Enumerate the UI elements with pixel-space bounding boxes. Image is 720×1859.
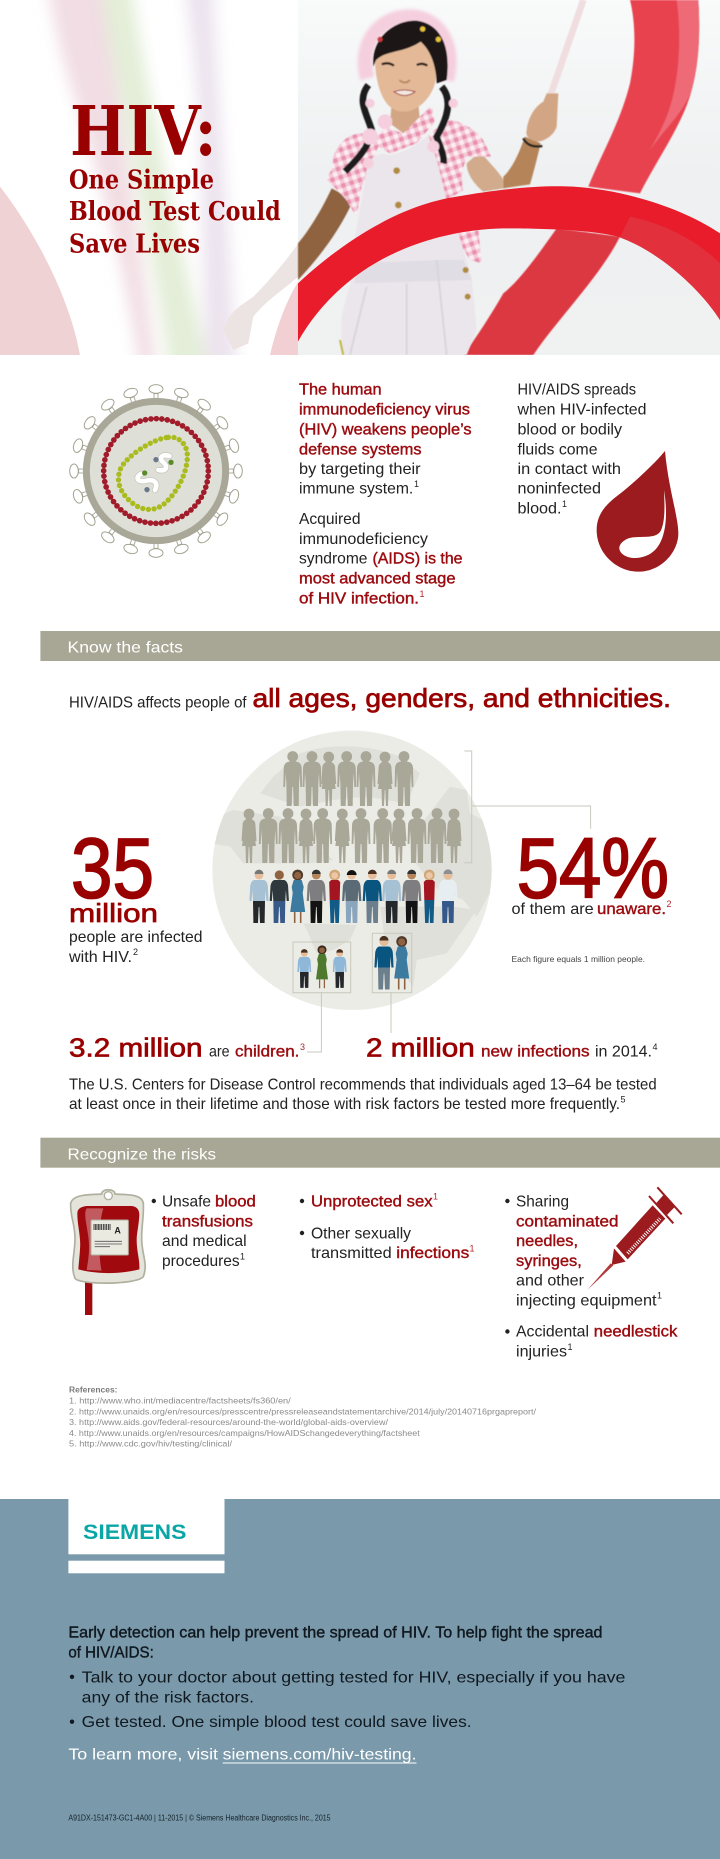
feathers [362, 99, 458, 169]
call to action: of HIV/AIDS: [68, 1644, 154, 1661]
pigtails [345, 85, 372, 172]
text block: how HIV spreads: fluids come [518, 441, 598, 458]
text block: how HIV spreads: blood or bodily [518, 421, 622, 438]
stat: 54 percent unaware: unaware. [597, 901, 666, 918]
section heading: Know the facts: Know the facts [68, 640, 183, 657]
section heading: Recognize the risks: Recognize the risks [68, 1146, 216, 1163]
unaware figures, row 2 [242, 808, 462, 863]
list: needles and needlestick: 1 [657, 1290, 662, 1300]
list: blood transfusions: transfusions [162, 1213, 253, 1230]
chart: globe with people figures [210, 731, 493, 1010]
list: blood transfusions: 1 [240, 1252, 245, 1262]
stat: 3.2 million children: children. [235, 1044, 299, 1061]
list: needles and needlestick: needles, [516, 1233, 578, 1250]
face [375, 35, 436, 112]
stat: 2 million new infections: 4 [652, 1042, 658, 1052]
headline: affects all ages: HIV/AIDS affects people of [69, 695, 247, 712]
list: blood transfusions: procedures [162, 1253, 240, 1270]
text block: HIV and AIDS definition: immunodeficiency [299, 531, 428, 548]
list: unprotected sex and infections: 1 [470, 1244, 475, 1254]
connector: unaware bracket [307, 751, 591, 1052]
stat: 3.2 million children: are [209, 1044, 230, 1061]
text block: HIV and AIDS definition: (AIDS) is the [372, 551, 463, 568]
arms [298, 188, 353, 280]
stat: 2 million new infections: 2 million [366, 1033, 475, 1063]
list: needles and needlestick: contaminated [516, 1213, 618, 1230]
text block: HIV and AIDS definition: defense systems [299, 441, 422, 458]
stat: 3.2 million children [69, 1033, 305, 1063]
front ribbon arch [298, 186, 720, 342]
stat: 35 million: with HIV. [68, 949, 132, 966]
text block: CDC recommendation: at least once in their lifetime and those with risk factors be tested more frequently. [69, 1096, 620, 1113]
references [69, 1385, 537, 1449]
list: needles and needlestick: Accidental [516, 1324, 589, 1341]
title: Blood Test Could [69, 197, 281, 227]
list: needles and needlestick: syringes, [516, 1253, 582, 1270]
text block: CDC recommendation [69, 1076, 657, 1113]
call to action: siemens.com/hiv-testing. [223, 1746, 416, 1763]
stat: 2 million new infections: in 2014. [595, 1044, 652, 1061]
section heading: Recognize the risks [40, 1138, 720, 1168]
stat: 3.2 million children: 3.2 million [69, 1033, 202, 1063]
icon: blood drop [597, 451, 678, 572]
references: 1. http://www.who.int/mediacentre/factsheets/fs360/en/ [69, 1395, 291, 1405]
text block: HIV and AIDS definition: by targeting their [299, 461, 421, 478]
list: needles and needlestick: needlestick [594, 1324, 677, 1341]
call to action: Get tested. One simple blood test could save lives. [82, 1714, 472, 1731]
text block: how HIV spreads: HIV/AIDS spreads [518, 382, 636, 399]
stat: 35 million: 2 [133, 947, 138, 957]
footer panel [0, 1499, 720, 1859]
list: unprotected sex and infections: Unprotected sex [311, 1193, 433, 1210]
text block: how HIV spreads: blood. [518, 500, 562, 517]
shirt [326, 133, 383, 217]
aware figures, coloured row [249, 869, 458, 923]
call to action [68, 1624, 626, 1763]
unaware figures, row 1 [283, 751, 413, 806]
list: unprotected sex and infections: Other sexually [311, 1225, 411, 1242]
faded left photo background [0, 0, 298, 373]
stat: 54 percent unaware: of them are [512, 901, 594, 918]
list: needles and needlestick: and other [516, 1273, 584, 1290]
text block: how HIV spreads: noninfected [518, 481, 601, 498]
references: 4. http://www.unaids.org/en/resources/campaigns/HowAIDSchangedeverything/factsheet [69, 1428, 420, 1438]
neck [390, 103, 420, 133]
icon: blood bag: A [114, 1226, 121, 1236]
text block: HIV and AIDS definition: The human [299, 382, 382, 399]
hair [373, 21, 448, 83]
note: figure legend: Each figure equals 1 million people. [512, 954, 645, 964]
icon: syringe [587, 1187, 682, 1290]
footer legal: A91DX-151473-GC1-4A00 | 11-2015 | © Siemens Healthcare Diagnostics Inc., 2015 [68, 1814, 331, 1823]
call to action: any of the risk factors. [82, 1689, 254, 1706]
text block: HIV and AIDS definition: most advanced stage [299, 571, 456, 588]
text block: HIV and AIDS definition: Acquired [299, 511, 360, 528]
text block: HIV and AIDS definition: 1 [414, 479, 419, 489]
icon: HIV virus [70, 385, 242, 557]
text block: how HIV spreads: in contact with [518, 461, 621, 478]
list: needles and needlestick: injecting equipment [516, 1292, 657, 1309]
references: 3. http://www.aids.gov/federal-resources/around-the-world/global-aids-overview/ [69, 1417, 389, 1427]
text block: HIV and AIDS definition: (HIV) weakens people’s [299, 421, 472, 438]
text block: how HIV spreads [516, 382, 646, 517]
text block: CDC recommendation: The U.S. Centers for Disease Control recommends that individuals aged 13–64 be tested [69, 1076, 657, 1093]
references: 5. http://www.cdc.gov/hiv/testing/clinical/ [69, 1439, 233, 1449]
stat: 2 million new infections: new infections [481, 1044, 590, 1061]
stat: 35 million: people are infected [69, 929, 202, 946]
text block: HIV and AIDS definition: of HIV infection. [299, 590, 419, 607]
title: Save Lives [69, 230, 200, 260]
list: blood transfusions: blood [215, 1193, 256, 1210]
list: needles and needlestick: 1 [568, 1342, 573, 1352]
overalls [342, 135, 477, 355]
text block: CDC recommendation: 5 [620, 1094, 626, 1104]
globe [210, 731, 493, 1010]
list: blood transfusions: and medical [162, 1233, 247, 1250]
stat: 35 million: million [69, 898, 158, 928]
call to action: Early detection can help prevent the spread of HIV. To help fight the spread [68, 1624, 602, 1641]
features [382, 63, 394, 66]
call to action: To learn more, visit [68, 1746, 219, 1763]
references: 2. http://www.unaids.org/en/resources/presscentre/pressreleaseandstatementarchive/2014/july/20140716prgapreport/ [69, 1406, 537, 1416]
text block: HIV and AIDS definition: immunodeficiency virus [299, 401, 470, 418]
list: needles and needlestick: injuries [516, 1344, 567, 1361]
title: One Simple [69, 165, 214, 195]
text block: HIV and AIDS definition: immune system. [299, 481, 413, 498]
stick [550, 0, 583, 97]
list: unprotected sex and infections [300, 1192, 475, 1262]
list: needles and needlestick [505, 1193, 677, 1361]
text block: how HIV spreads: when HIV-infected [516, 401, 646, 418]
children box [293, 942, 351, 993]
icon: blood bag [71, 1190, 145, 1315]
text block: HIV and AIDS definition: 1 [420, 589, 425, 599]
new infections box [372, 933, 412, 993]
text block: HIV and AIDS definition [299, 382, 472, 607]
stat: 2 million new infections [366, 1033, 658, 1063]
stat: 35 million: 35 [71, 821, 154, 916]
list: blood transfusions [152, 1193, 256, 1270]
headband [365, 17, 449, 80]
call to action: Talk to your doctor about getting tested for HIV, especially if you have [82, 1669, 626, 1686]
text block: how HIV spreads: 1 [562, 499, 567, 509]
stat: 54 percent unaware: 2 [666, 899, 672, 909]
references: References: [69, 1385, 118, 1395]
stat: 35 million [68, 821, 202, 966]
list: unprotected sex and infections: 1 [433, 1192, 438, 1202]
headline: affects all ages: all ages, genders, and ethnicities. [252, 683, 671, 713]
list: unprotected sex and infections: transmitted [311, 1245, 392, 1262]
girl [298, 0, 583, 355]
headline: affects all ages [69, 683, 671, 713]
list: needles and needlestick: Sharing [516, 1193, 569, 1210]
back ribbon [463, 0, 699, 355]
stat: 3.2 million children: 3 [300, 1042, 305, 1052]
list: unprotected sex and infections: infections [396, 1245, 469, 1262]
logo: Siemens: SIEMENS [83, 1520, 186, 1544]
hand [526, 93, 558, 142]
logo: Siemens [68, 1499, 225, 1573]
title: HIV: [70, 92, 217, 172]
section heading: Know the facts [40, 631, 720, 661]
title [69, 92, 281, 260]
stat: 54 percent unaware: 54% [517, 821, 669, 916]
text block: HIV and AIDS definition: syndrome [299, 551, 368, 568]
hero photo panel [0, 0, 720, 373]
photo: girl with red ribbon [298, 0, 720, 355]
list: blood transfusions: Unsafe [162, 1193, 211, 1210]
